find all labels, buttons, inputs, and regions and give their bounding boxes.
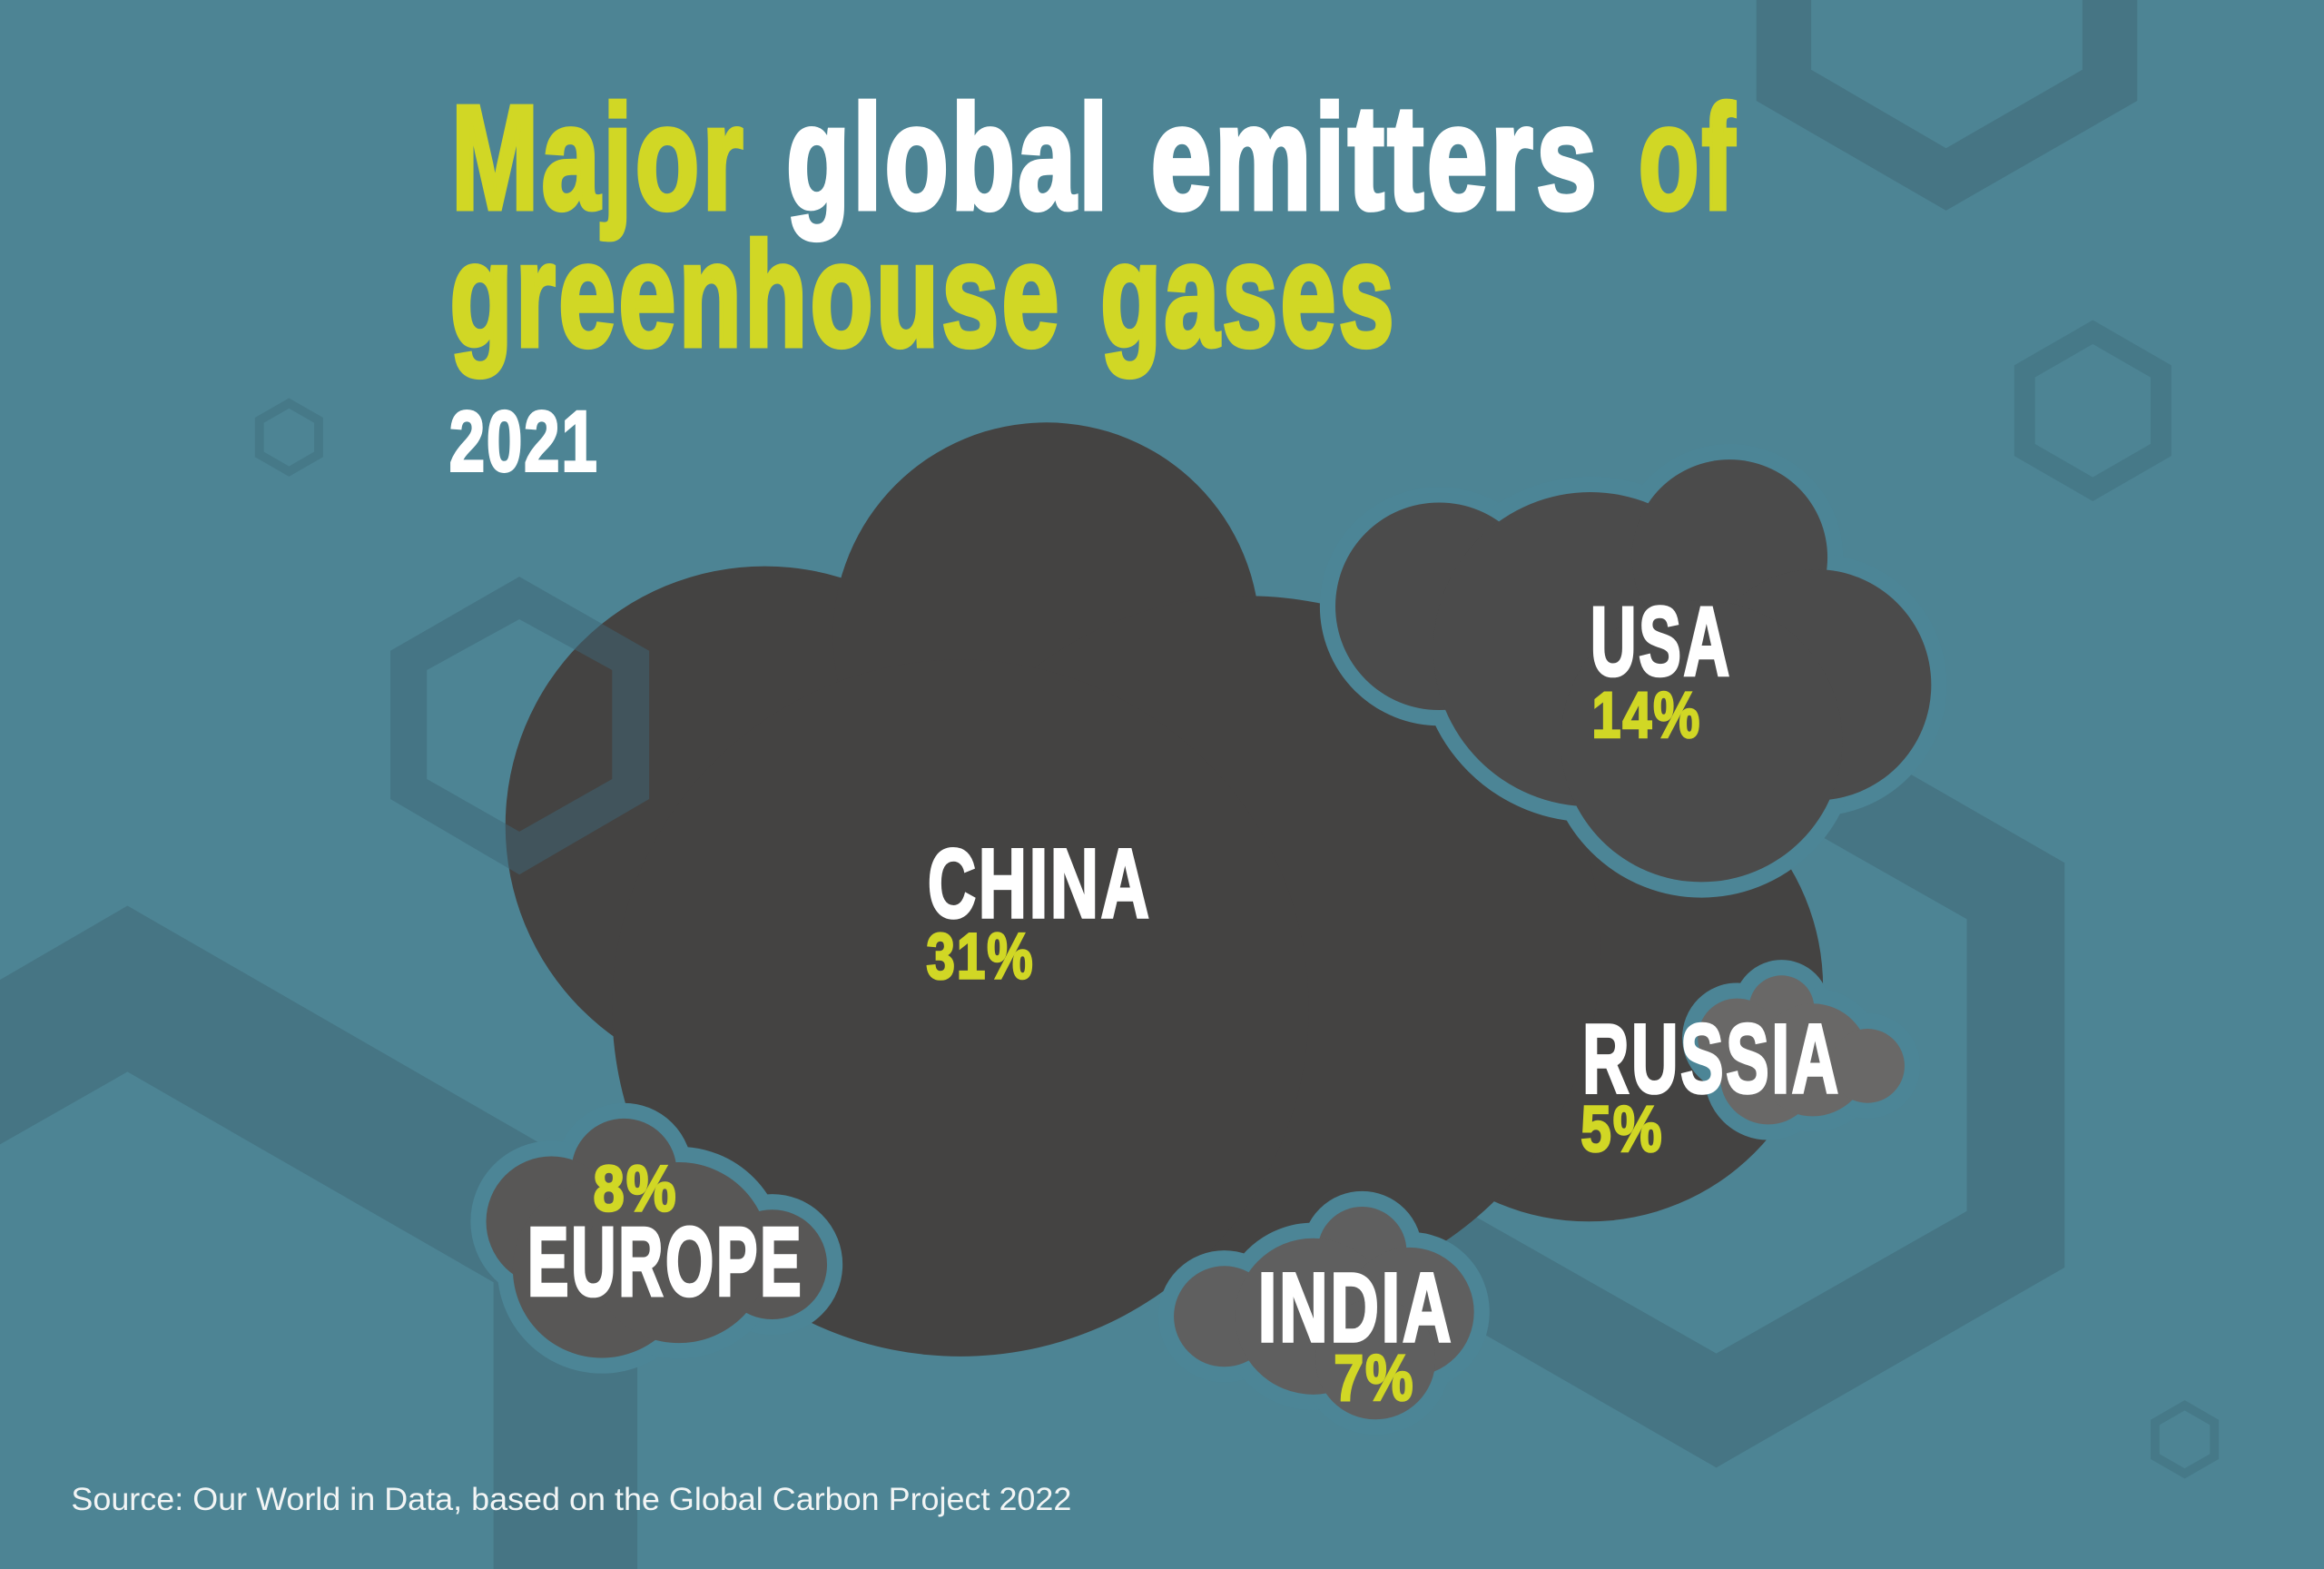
label: China: CHINA — [928, 828, 1152, 938]
title: gases — [1100, 212, 1397, 378]
title — [450, 74, 1738, 378]
cloud: Europe — [487, 1119, 827, 1358]
cloud: China — [506, 422, 1823, 1357]
background hexagon: large right — [1368, 663, 2064, 1467]
label: China — [926, 828, 1152, 993]
cloud: Russia — [1698, 975, 1905, 1124]
label: Russia: 5% — [1581, 1093, 1664, 1166]
label: Europe: EUROPE — [527, 1207, 803, 1317]
label: India: 7% — [1334, 1342, 1415, 1415]
overlapping hexagon on China — [390, 577, 649, 874]
label: Europe — [527, 1152, 803, 1317]
title: Major — [451, 74, 746, 241]
label: Russia — [1581, 1003, 1841, 1166]
title: of — [1639, 74, 1738, 241]
label: India: INDIA — [1258, 1252, 1453, 1362]
subtitle: year: 2021 — [449, 393, 599, 489]
background hexagon: top right — [1757, 0, 2137, 211]
label: Russia: RUSSIA — [1582, 1003, 1841, 1113]
label: USA — [1590, 587, 1732, 752]
background hexagon: small left — [260, 403, 319, 471]
background hexagon: large left — [0, 906, 637, 1569]
title: greenhouse — [450, 212, 1062, 378]
cloud: India — [1174, 1207, 1474, 1419]
title: emitters — [1151, 74, 1600, 241]
label: China: 31% — [926, 921, 1035, 993]
label: USA: 14% — [1591, 679, 1701, 752]
label: India — [1258, 1252, 1453, 1415]
background hexagon: small bottom right — [2155, 1406, 2214, 1474]
cloud: USA — [1335, 459, 1931, 882]
source note: Source: Our World in Data, based on the Global Carbon Project 2022 — [71, 1482, 1071, 1517]
label: Europe: 8% — [594, 1152, 678, 1225]
background hexagon: medium right — [2024, 332, 2161, 489]
title: global — [786, 74, 1111, 241]
label: USA: USA — [1590, 587, 1732, 696]
